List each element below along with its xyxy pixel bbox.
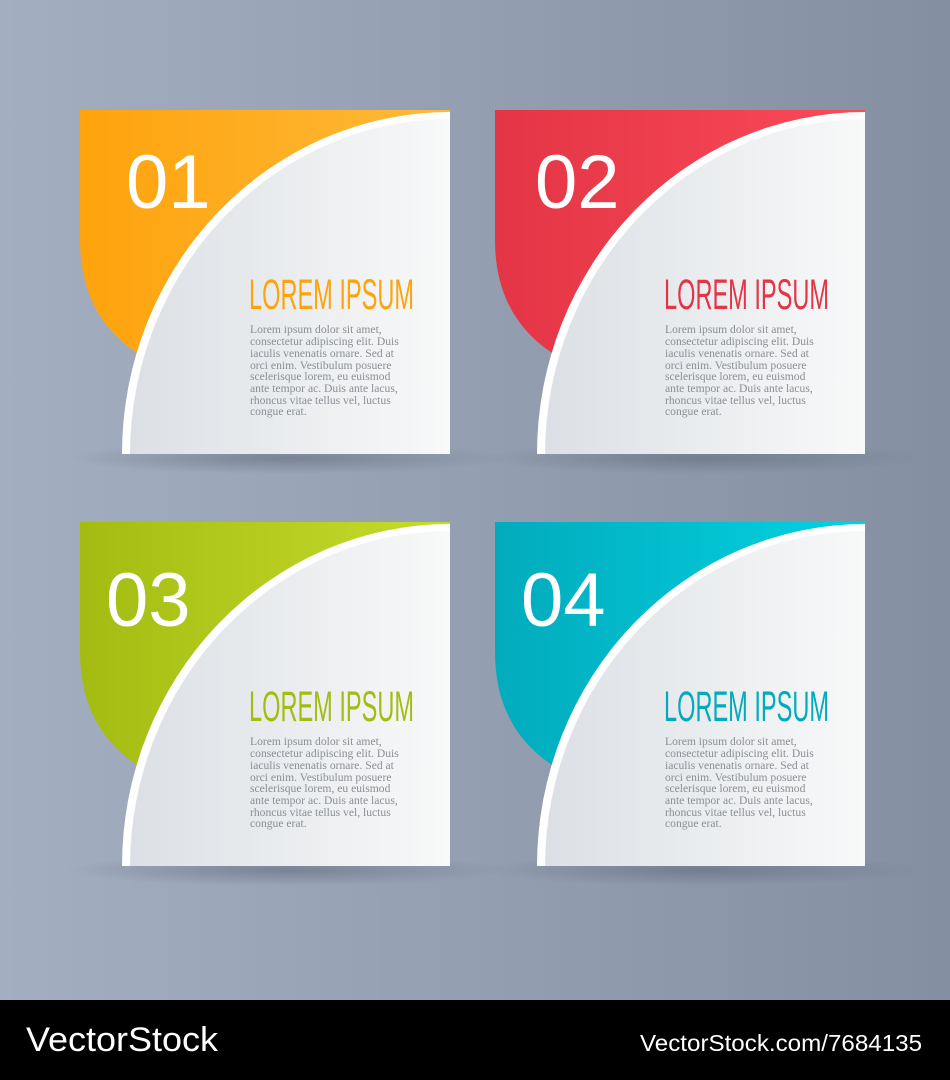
- body text 01: congue erat.: [250, 405, 307, 418]
- panel: card 01: [66, 110, 506, 474]
- body text 03: orci enim. Vestibulum posuere: [250, 771, 391, 784]
- body text 01: iaculis venenatis ornare. Sed at: [250, 347, 395, 360]
- body text 02: orci enim. Vestibulum posuere: [665, 359, 806, 372]
- colored tab 01: [80, 110, 450, 400]
- body text 04: consectetur adipiscing elit. Duis: [665, 747, 814, 760]
- body text 03: congue erat.: [250, 817, 307, 830]
- body text 03: rhoncus vitae tellus vel, luctus: [250, 806, 391, 819]
- panel: card 03: [66, 522, 506, 886]
- body text 01: orci enim. Vestibulum posuere: [250, 359, 391, 372]
- panel: card 02: [481, 110, 921, 474]
- heading 01: LOREM IPSUM: [249, 271, 414, 319]
- body text 04: scelerisque lorem, eu euismod: [665, 782, 806, 795]
- heading 03: LOREM IPSUM: [249, 683, 414, 731]
- body text 03: iaculis venenatis ornare. Sed at: [250, 759, 395, 772]
- body text 01: ante tempor ac. Duis ante lacus,: [250, 382, 398, 395]
- colored tab 02: [495, 110, 865, 400]
- body text 02: Lorem ipsum dolor sit amet,: [665, 323, 797, 336]
- body text 04: Lorem ipsum dolor sit amet,: [665, 735, 797, 748]
- body text 04: ante tempor ac. Duis ante lacus,: [665, 794, 813, 807]
- colored tab 04: [495, 522, 865, 812]
- footer url: VectorStock.com/7684135: [640, 1030, 922, 1056]
- body text 02: iaculis venenatis ornare. Sed at: [665, 347, 810, 360]
- body text 02: consectetur adipiscing elit. Duis: [665, 335, 814, 348]
- body text 03: ante tempor ac. Duis ante lacus,: [250, 794, 398, 807]
- body text 01: scelerisque lorem, eu euismod: [250, 370, 391, 383]
- body text 01: consectetur adipiscing elit. Duis: [250, 335, 399, 348]
- footer bar: [0, 1000, 950, 1080]
- body text 02: congue erat.: [665, 405, 722, 418]
- body text 04: orci enim. Vestibulum posuere: [665, 771, 806, 784]
- body text 02: scelerisque lorem, eu euismod: [665, 370, 806, 383]
- panel: card 04: [481, 522, 921, 886]
- body text 03: Lorem ipsum dolor sit amet,: [250, 735, 382, 748]
- colored tab 03: [80, 522, 450, 812]
- number 04: 04: [521, 558, 606, 643]
- body text 03: scelerisque lorem, eu euismod: [250, 782, 391, 795]
- footer logo: VectorStock: [26, 1021, 219, 1059]
- body text 03: consectetur adipiscing elit. Duis: [250, 747, 399, 760]
- number 02: 02: [535, 140, 620, 225]
- number 01: 01: [126, 140, 211, 225]
- body text 04: congue erat.: [665, 817, 722, 830]
- body text 01: rhoncus vitae tellus vel, luctus: [250, 394, 391, 407]
- body text 04: rhoncus vitae tellus vel, luctus: [665, 806, 806, 819]
- number 03: 03: [106, 558, 191, 643]
- body text 02: ante tempor ac. Duis ante lacus,: [665, 382, 813, 395]
- body text 01: Lorem ipsum dolor sit amet,: [250, 323, 382, 336]
- body text 04: iaculis venenatis ornare. Sed at: [665, 759, 810, 772]
- body text 02: rhoncus vitae tellus vel, luctus: [665, 394, 806, 407]
